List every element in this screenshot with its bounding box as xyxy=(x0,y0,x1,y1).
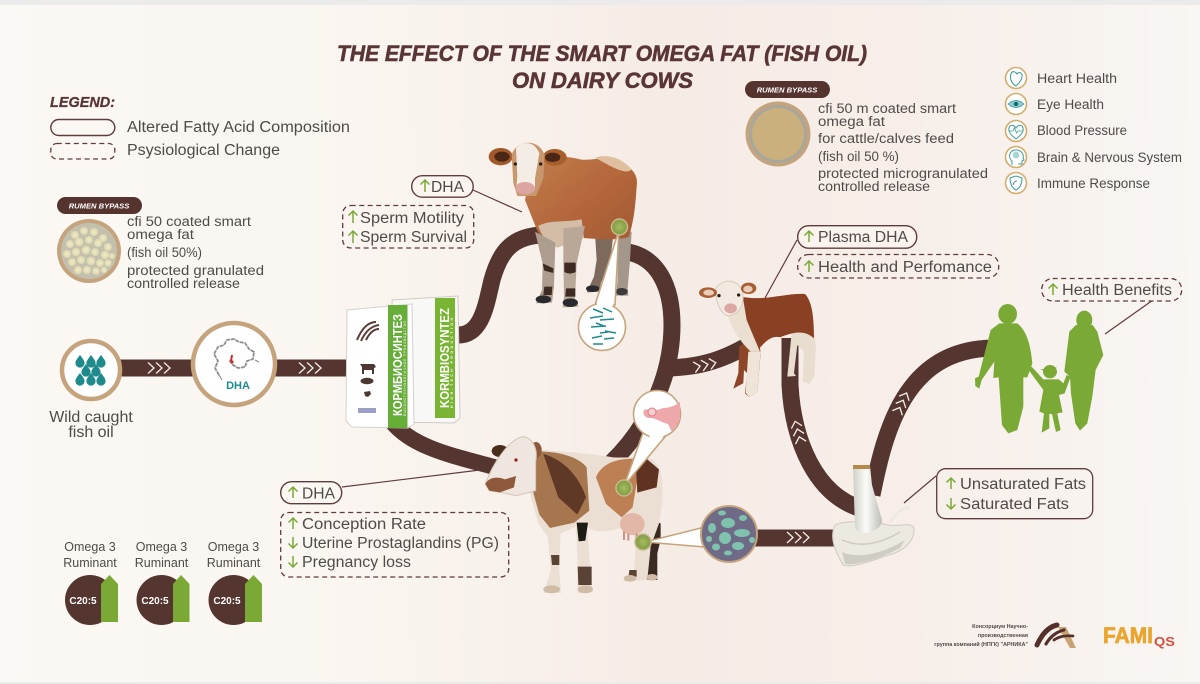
callout: milk fats: Unsaturated Fats xyxy=(960,476,1086,493)
panel: rumen bypass granulated: cfi 50 coated smart xyxy=(127,214,251,229)
logo: FAMI-QS: FAMI xyxy=(1103,623,1153,648)
callout: top cow DHA: DHA xyxy=(431,179,465,196)
callout: top cow DHA xyxy=(412,176,522,212)
badge: omega 3 second: Ruminant xyxy=(135,556,189,570)
badge: omega 3 first: C20:5 xyxy=(69,596,97,607)
icon: DHA molecule: DHA xyxy=(226,380,250,392)
callout: sperm changes: Sperm Survival xyxy=(360,229,467,246)
icon: family silhouette xyxy=(975,304,1103,433)
arrows: flow chevrons xyxy=(148,357,912,543)
badge: omega 3 third xyxy=(207,540,262,625)
logo: Arnika consortium: группа компаний (НПГК) "АРНИКА" xyxy=(934,641,1028,648)
icon: product bags: HIGH-TECH PRODUCTION xyxy=(450,318,454,408)
panel: rumen bypass granulated: controlled release xyxy=(127,276,240,291)
badge: omega 3 third: Omega 3 xyxy=(208,540,259,554)
icon: product bags xyxy=(346,296,460,428)
badge: omega 3 first xyxy=(63,540,118,625)
panel: rumen bypass microgranulated: (fish oil 50 %) xyxy=(818,149,899,164)
callout: health benefits xyxy=(1042,278,1182,334)
panel: omega 3 badges xyxy=(63,540,262,625)
callout: calf health and performance xyxy=(798,254,999,278)
callout: sperm changes xyxy=(343,206,474,248)
icon: wild caught fish oil drops xyxy=(62,341,120,399)
callout: uterus magnifier xyxy=(616,390,680,496)
label: wild caught fish oil: Wild caught xyxy=(49,409,133,426)
icon: milk bottle and splash xyxy=(833,465,914,566)
cow: bottom white and brown cow xyxy=(485,437,663,593)
panel: health benefits icon list: Blood Pressure xyxy=(1037,123,1127,138)
title xyxy=(337,41,867,93)
callout: sperm changes: Sperm Motility xyxy=(360,210,464,227)
logo: Arnika consortium: Консорциум Научно- xyxy=(972,624,1028,630)
icon: eye xyxy=(1006,94,1026,114)
callout: mammary tissue magnifier xyxy=(635,506,757,562)
badge: omega 3 second xyxy=(135,540,190,625)
callout: reproduction changes: Uterine Prostaglandins (PG) xyxy=(302,535,499,552)
panel: health benefits icon list xyxy=(1006,68,1182,194)
icon: product bags: KORMBIOSYNTEZ xyxy=(438,308,452,408)
label: wild caught fish oil: fish oil xyxy=(68,424,114,441)
badge: omega 3 second: Omega 3 xyxy=(136,540,187,554)
callout: bottom cow DHA: DHA xyxy=(302,486,336,502)
icon: blood pressure xyxy=(1006,120,1026,142)
panel: rumen bypass granulated: omega fat xyxy=(127,227,194,242)
callout: calf health and performance: Health and Perfomance xyxy=(818,259,992,276)
panel: rumen bypass granulated: RUMEN BYPASS xyxy=(69,202,129,210)
panel: rumen bypass microgranulated: controlled release xyxy=(818,179,930,194)
callout: reproduction changes: Pregnancy loss xyxy=(302,554,411,571)
panel: health benefits icon list: Heart Health xyxy=(1037,71,1117,86)
badge: omega 3 first: Omega 3 xyxy=(64,540,116,554)
callout: calf plasma DHA xyxy=(765,226,917,298)
callout: milk fats xyxy=(904,469,1093,519)
panel: rumen bypass microgranulated: RUMEN BYPASS xyxy=(757,86,817,94)
icon: product bags: ВЫСОКОТЕХНОЛОГИЧНОЕ ПРОИЗВОДСТВО xyxy=(403,320,407,416)
callout: milk fats: Saturated Fats xyxy=(960,496,1069,513)
callout: bottom cow DHA xyxy=(281,470,480,504)
panel: health benefits icon list: Brain & Nervous System xyxy=(1037,150,1182,165)
callout: health benefits: Health Benefits xyxy=(1062,282,1172,299)
logo: FAMI-QS xyxy=(1103,623,1175,649)
legend xyxy=(50,95,350,159)
panel: rumen bypass microgranulated: cfi 50 m coated smart xyxy=(818,101,956,116)
panel: rumen bypass microgranulated xyxy=(745,81,988,194)
title: THE EFFECT OF THE SMART OMEGA FAT (FISH OIL) xyxy=(337,41,867,66)
icon: immune shield xyxy=(1006,172,1026,194)
badge: omega 3 third: C20:5 xyxy=(213,596,241,607)
legend: Psysiological Change xyxy=(127,142,280,159)
callout: reproduction changes xyxy=(281,512,509,577)
panel: rumen bypass granulated xyxy=(57,197,264,291)
legend: LEGEND: xyxy=(50,95,115,111)
panel: rumen bypass microgranulated: omega fat xyxy=(818,114,885,129)
logo: FAMI-QS: QS xyxy=(1154,634,1175,649)
pathways: brown flow bands xyxy=(118,235,992,538)
title: ON DAIRY COWS xyxy=(512,68,693,93)
icon: heart xyxy=(1006,68,1026,88)
panel: rumen bypass granulated: protected granulated xyxy=(127,263,264,278)
icon: DHA molecule xyxy=(193,323,275,405)
panel: rumen bypass microgranulated: protected microgranulated xyxy=(818,166,988,181)
icon: brain xyxy=(1006,146,1026,168)
cow: top brown cow xyxy=(489,143,637,307)
label: wild caught fish oil xyxy=(49,409,133,441)
badge: omega 3 third: Ruminant xyxy=(207,556,261,570)
icon: product bags: КОРМБИОСИНТЕЗ xyxy=(391,314,405,416)
badge: omega 3 first: Ruminant xyxy=(63,556,117,570)
cow: calf xyxy=(699,281,816,397)
callout: calf plasma DHA: Plasma DHA xyxy=(818,229,909,246)
panel: health benefits icon list: Immune Response xyxy=(1037,176,1150,191)
panel: rumen bypass microgranulated: for cattle/calves feed xyxy=(818,131,954,146)
logo: Arnika consortium xyxy=(934,624,1076,648)
logo: Arnika consortium: производственная xyxy=(978,633,1028,639)
legend: Altered Fatty Acid Composition xyxy=(127,119,350,136)
callout: sperm magnifier xyxy=(578,219,628,350)
callout: reproduction changes: Conception Rate xyxy=(302,516,426,533)
panel: rumen bypass granulated: (fish oil 50%) xyxy=(127,245,202,260)
badge: omega 3 second: C20:5 xyxy=(141,596,169,607)
panel: health benefits icon list: Eye Health xyxy=(1037,97,1104,112)
